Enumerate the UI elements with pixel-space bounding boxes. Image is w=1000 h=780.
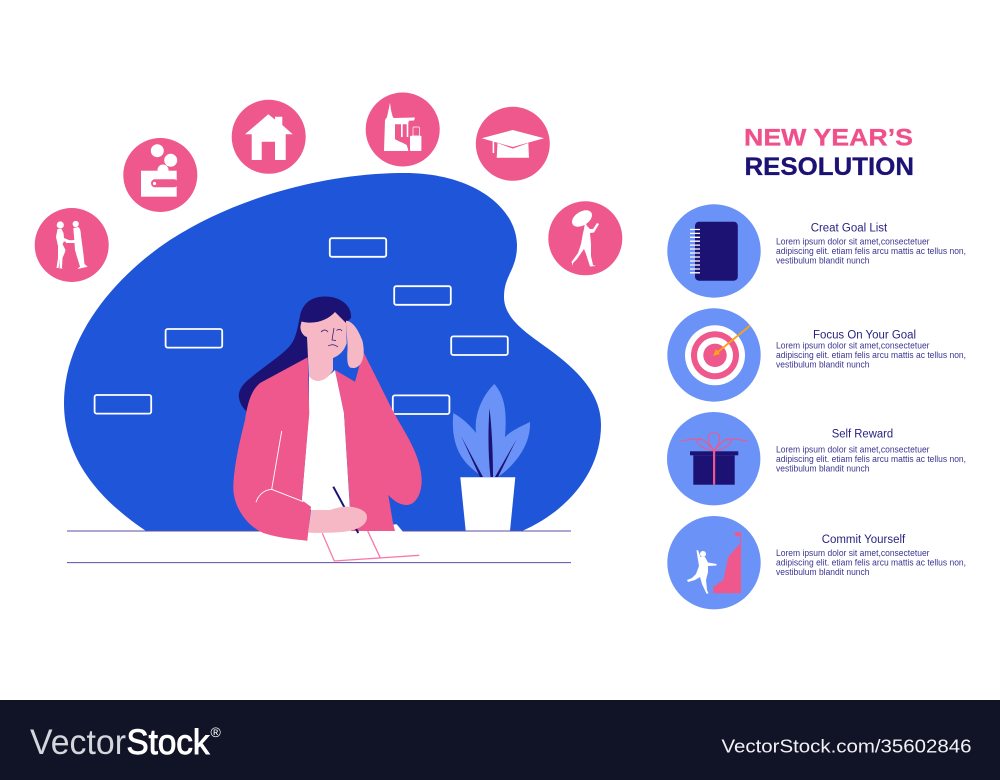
shirt [301,370,350,510]
icon: notebook [667,204,761,298]
description: Lorem ipsum dolor sit amet,consectetuer [776,548,930,558]
description: Lorem ipsum dolor sit amet,consectetuer [776,444,930,454]
icon: target and arrow [667,308,761,402]
icon: gift box [667,412,760,505]
notebook on table [322,524,419,561]
heading: Creat Goal List [811,223,888,235]
footer bar [0,700,1000,780]
neck and face [300,312,347,381]
facial features [321,328,342,347]
table [67,531,571,563]
icon: figure and mountain flag [667,516,761,609]
description: vestibulum blandit nunch [776,464,870,474]
description: adipiscing elit. etiam felis arcu mattis ac tellus non, [776,454,966,464]
blue background blob [64,173,601,531]
writing hand [308,507,367,533]
description: adipiscing elit. etiam felis arcu mattis ac tellus non, [776,558,966,568]
description: vestibulum blandit nunch [776,256,870,266]
heading: Self Reward [832,428,893,440]
icon: graduation cap [476,107,550,181]
logo wordmark: Vector [30,723,126,762]
description: adipiscing elit. etiam felis arcu mattis ac tellus non, [776,246,966,256]
step 4: commit yourself [667,516,966,609]
icon: running woman [548,201,622,275]
logo wordmark [30,723,222,762]
step 3: self reward [667,412,966,505]
jacket right [335,352,422,531]
image id: VectorStock.com/35602846 [722,736,972,757]
icon: couple [35,208,109,282]
title: NEW YEAR’S [744,124,913,152]
icon: house [232,100,306,174]
heading: Commit Yourself [822,534,906,546]
woman thinking [233,296,422,541]
icon: wallet and coins [123,138,197,212]
step 2: focus on your goal [667,308,966,402]
step 1: create goal list [667,204,966,298]
description: adipiscing elit. etiam felis arcu mattis ac tellus non, [776,350,966,360]
icon: travel landmarks [366,92,440,166]
hair [239,296,351,412]
description: Lorem ipsum dolor sit amet,consectetuer [776,236,930,246]
jacket left [233,357,311,541]
thought placeholder boxes [95,238,508,414]
hand on head [346,321,364,368]
logo wordmark: ® [210,724,222,740]
description: vestibulum blandit nunch [776,360,870,370]
logo wordmark: Stock [126,723,210,762]
potted plant [453,384,530,531]
description: vestibulum blandit nunch [776,567,870,577]
description: Lorem ipsum dolor sit amet,consectetuer [776,340,930,350]
jacket seams [256,431,303,502]
title: RESOLUTION [744,153,914,181]
title [744,124,914,181]
pencil [333,487,358,533]
heading: Focus On Your Goal [813,330,916,342]
